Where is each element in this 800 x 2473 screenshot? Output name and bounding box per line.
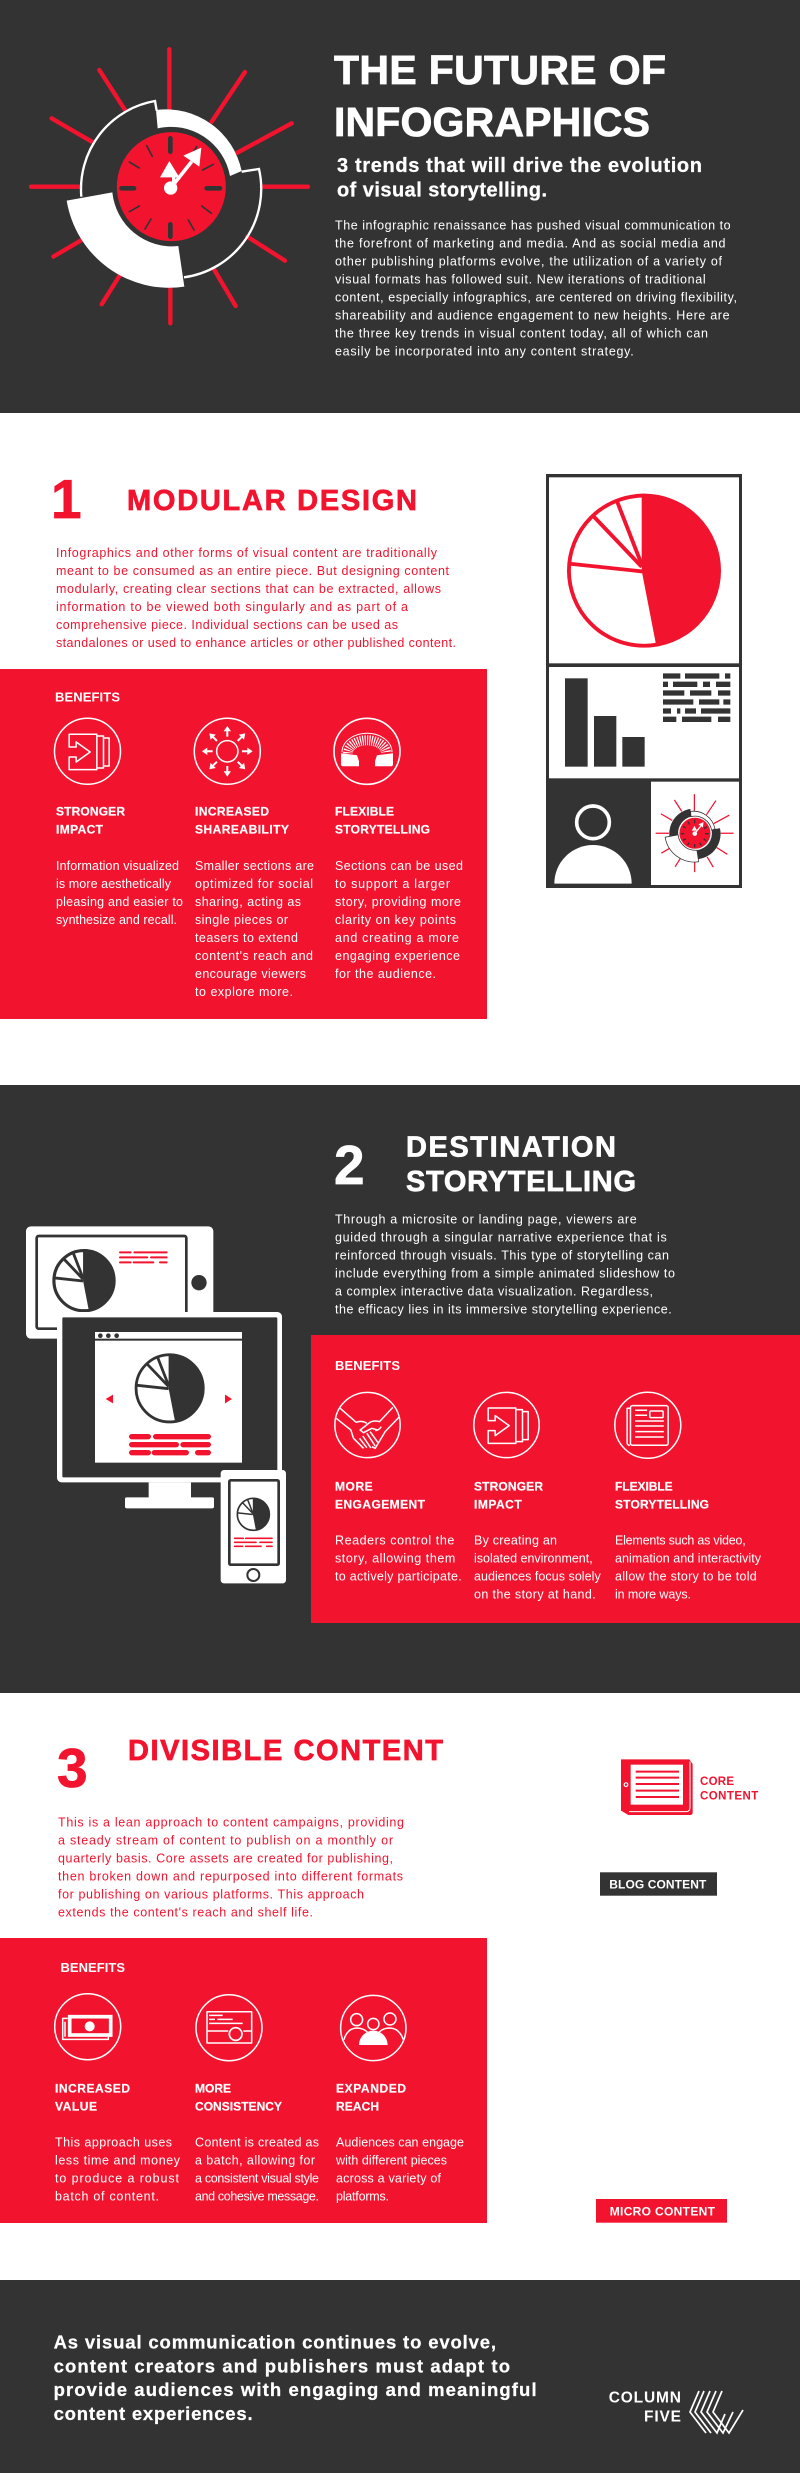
benefit text: stronger impact: By creating an (474, 1534, 557, 1548)
icon: core content tablet (621, 1759, 693, 1815)
benefit text: increased shareability: single pieces or (195, 913, 288, 927)
icon: consistency card (196, 1995, 262, 2061)
benefit headings 2: STRONGER (474, 1479, 543, 1493)
benefit text: increased shareability: Smaller sections are (195, 859, 314, 873)
section number 3: 3 (57, 1737, 88, 1799)
benefits label: BENEFITS (60, 1960, 125, 1975)
section 1 description: standalones or used to enhance articles or other published content. (56, 636, 456, 650)
benefit headings 2: MORE (335, 1479, 373, 1493)
heading: destination storytelling (406, 1132, 636, 1198)
intro text: content, especially infographics, are centered on driving flexibility, (335, 290, 737, 304)
benefit headings 1: FLEXIBLE (335, 804, 394, 818)
subtitle: of visual storytelling. (337, 180, 547, 202)
benefit text: flexible storytelling: clarity on key points (335, 913, 456, 927)
intro text: the forefront of marketing and media. And as social media and (335, 236, 726, 250)
section number 1: 1 (51, 468, 82, 530)
benefit text: increased shareability: to explore more. (195, 985, 293, 999)
illustration: devices (26, 1226, 286, 1583)
phone (221, 1470, 286, 1583)
benefit text: stronger impact (474, 1534, 601, 1602)
intro text: The infographic renaissance has pushed visual communication to (335, 218, 731, 232)
benefit text: flexible storytelling: in more ways. (615, 1588, 691, 1602)
benefit text: increased shareability: content's reach and (195, 949, 313, 963)
icon: stronger impact (55, 718, 120, 784)
panel: header (0, 0, 800, 413)
closing statement: content experiences. (54, 2403, 253, 2424)
benefit text: increased shareability: optimized for social (195, 877, 313, 891)
benefit headings 2: ENGAGEMENT (335, 1498, 426, 1512)
benefit text: flexible storytelling: engaging experience (335, 949, 460, 963)
benefits label: BENEFITS (335, 1358, 400, 1373)
benefit headings 3 (55, 2081, 406, 2113)
section 2 description: guided through a singular narrative experience that is (335, 1231, 667, 1245)
benefit text: expanded reach: platforms. (336, 2190, 389, 2204)
benefit text: flexible storytelling (615, 1534, 762, 1602)
panel: benefits 3 (0, 1938, 487, 2223)
tablet (26, 1226, 213, 1339)
label: core content: CONTENT (700, 1790, 758, 1802)
benefit text: flexible storytelling: Elements such as video, (615, 1534, 746, 1548)
benefit headings 2 (335, 1479, 709, 1512)
section 1 description (56, 546, 456, 650)
benefit text: stronger impact: is more aesthetically (56, 877, 172, 891)
section 1 description: comprehensive piece. Individual sections can be used as (56, 618, 398, 632)
subtitle: 3 trends that will drive the evolution (337, 155, 702, 177)
label: micro content: MICRO CONTENT (610, 2204, 716, 2218)
benefit text: expanded reach: with different pieces (335, 2154, 447, 2168)
benefit text: flexible storytelling: for the audience. (335, 967, 436, 981)
heading: destination storytelling: DESTINATION (406, 1132, 616, 1164)
section 3 description: quarterly basis. Core assets are created for publishing, (58, 1851, 393, 1865)
benefit text: stronger impact: synthesize and recall. (56, 913, 177, 927)
label: blog content (600, 1872, 717, 1896)
section 1 description: information to be viewed both singularly and as part of a (56, 600, 408, 614)
panel: divisible content (0, 1735, 758, 2223)
section 1 description: Infographics and other forms of visual content are traditionally (56, 546, 438, 560)
benefit text: increased value: to produce a robust (55, 2172, 180, 2186)
benefit text: flexible storytelling (335, 859, 463, 981)
icon: clock with rays (31, 49, 308, 323)
benefit text: increased value (55, 2136, 181, 2204)
icon: mini clock (656, 794, 734, 872)
label: core content (700, 1776, 758, 1802)
benefit text: more engagement (335, 1534, 462, 1584)
benefit text: increased value: less time and money (55, 2154, 181, 2168)
benefit text: stronger impact (56, 859, 183, 927)
section 1 description: meant to be consumed as an entire piece. But designing content (56, 564, 450, 578)
benefit text: more consistency: Content is created as (195, 2136, 319, 2150)
benefit headings 1: STORYTELLING (335, 823, 430, 837)
benefit text: expanded reach (335, 2136, 464, 2204)
section 3 description (58, 1815, 404, 1919)
monitor (57, 1312, 282, 1508)
intro text: other publishing platforms evolve, the utilization of a variety of (335, 254, 723, 268)
benefit text: stronger impact: audiences focus solely (474, 1570, 601, 1584)
logo: column five (609, 2390, 743, 2433)
logo: column five: FIVE (644, 2409, 681, 2426)
intro text: easily be incorporated into any content strategy. (335, 344, 634, 358)
benefit text: increased shareability: encourage viewers (195, 967, 306, 981)
icon: handshake (335, 1392, 400, 1458)
intro text (335, 218, 737, 358)
label: core content: CORE (700, 1776, 734, 1788)
logo: column five: COLUMN (609, 2390, 681, 2407)
benefit text: expanded reach: across a variety of (336, 2172, 442, 2186)
intro text: the three key trends in visual content today, all of which can (335, 326, 708, 340)
closing statement: As visual communication continues to evolve, (54, 2331, 496, 2352)
closing statement (54, 2331, 537, 2424)
icon: people (341, 1995, 406, 2061)
benefit headings 3: CONSISTENCY (195, 2099, 282, 2113)
section number 2: 2 (334, 1134, 365, 1196)
benefit headings 1: STRONGER (56, 804, 125, 818)
icon: person (554, 806, 632, 884)
section 1 description: modularly, creating clear sections that can be extracted, allows (56, 582, 441, 596)
benefit headings 3: EXPANDED (336, 2081, 406, 2095)
section 2 description (335, 1213, 675, 1317)
benefit text: expanded reach: Audiences can engage (336, 2136, 464, 2150)
intro text: shareability and audience engagement to new heights. Here are (335, 308, 730, 322)
heading: destination storytelling: STORYTELLING (406, 1166, 636, 1198)
benefit headings 1: INCREASED (195, 804, 269, 818)
benefit text: flexible storytelling: allow the story to be told (615, 1570, 757, 1584)
benefit headings 2: IMPACT (474, 1498, 522, 1512)
intro text: visual formats has followed suit. New iterations of traditional (335, 272, 706, 286)
benefit text: increased value: This approach uses (55, 2136, 172, 2150)
heading: modular design: MODULAR DESIGN (127, 485, 417, 517)
benefit text: stronger impact: on the story at hand. (474, 1588, 596, 1602)
benefit text: more engagement: Readers control the (335, 1534, 454, 1548)
icon: flexible storytelling slinky (334, 718, 400, 784)
title (334, 47, 666, 145)
panel: footer (0, 2280, 800, 2473)
title: INFOGRAPHICS (334, 99, 650, 145)
benefit headings 1: IMPACT (56, 823, 104, 837)
benefit headings 1 (56, 804, 430, 837)
benefit text: increased value: batch of content. (55, 2190, 159, 2204)
label: blog content: BLOG CONTENT (609, 1878, 707, 1892)
benefit text: more consistency: and cohesive message. (195, 2190, 319, 2204)
section 3 description: then broken down and repurposed into different formats (58, 1869, 403, 1883)
benefit text: increased shareability: teasers to extend (195, 931, 298, 945)
panel: destination storytelling (0, 1085, 800, 1693)
section 2 description: Through a microsite or landing page, viewers are (335, 1213, 637, 1227)
benefit headings 2: STORYTELLING (615, 1498, 709, 1512)
section 2 description: the efficacy lies in its immersive storytelling experience. (335, 1303, 672, 1317)
benefit text: more consistency (195, 2136, 319, 2204)
illustration: modular frame (546, 474, 742, 888)
pie chart: red (569, 494, 719, 646)
icon: money (55, 1994, 121, 2060)
benefit text: flexible storytelling: Sections can be used (335, 859, 463, 873)
text placeholder blocks (663, 673, 730, 722)
closing statement: provide audiences with engaging and meaningful (54, 2379, 537, 2400)
benefit text: increased shareability: sharing, acting as (195, 895, 301, 909)
benefit text: flexible storytelling: to support a larger (335, 877, 450, 891)
benefit headings 3: INCREASED (55, 2081, 130, 2095)
benefit text: flexible storytelling: and creating a more (335, 931, 459, 945)
icon: newspaper (615, 1392, 681, 1458)
section 3 description: extends the content's reach and shelf life. (58, 1905, 313, 1919)
section 3 description: a steady stream of content to publish on a monthly or (58, 1833, 393, 1847)
bar chart (565, 678, 645, 767)
benefit text: increased shareability (195, 859, 314, 999)
benefit text: more consistency: a batch, allowing for (195, 2154, 315, 2168)
section 2 description: include everything from a simple animated slideshow to (335, 1267, 675, 1281)
section 3 description: This is a lean approach to content campaigns, providing (58, 1815, 404, 1829)
benefits label: BENEFITS (55, 690, 120, 704)
icon: increased shareability (194, 718, 260, 784)
benefit text: stronger impact: pleasing and easier to (56, 895, 183, 909)
benefit text: more consistency: a consistent visual style (195, 2172, 319, 2186)
benefit headings 3: MORE (195, 2081, 231, 2095)
section 2 description: a complex interactive data visualization. Regardless, (335, 1285, 653, 1299)
benefit text: more engagement: to actively participate. (335, 1570, 462, 1584)
benefit text: more engagement: story, allowing them (335, 1552, 455, 1566)
title: THE FUTURE OF (334, 47, 666, 93)
benefit text: stronger impact: isolated environment, (474, 1552, 593, 1566)
closing statement: content creators and publishers must adapt to (54, 2355, 510, 2376)
benefit headings 1: SHAREABILITY (195, 823, 289, 837)
benefit text: flexible storytelling: story, providing more (335, 895, 461, 909)
benefit headings 2: FLEXIBLE (615, 1479, 673, 1493)
benefit text: flexible storytelling: animation and interactivity (615, 1552, 762, 1566)
benefit text: stronger impact: Information visualized (56, 859, 179, 873)
panel: modular design (0, 468, 742, 1019)
section 2 description: reinforced through visuals. This type of storytelling can (335, 1249, 669, 1263)
icon: stronger impact (474, 1392, 539, 1458)
label: micro content (596, 2199, 727, 2223)
panel: benefits 2 (311, 1335, 800, 1623)
panel: benefits 1 (0, 669, 487, 1019)
heading: divisible content: DIVISIBLE CONTENT (128, 1735, 443, 1767)
subtitle (337, 155, 702, 202)
benefit headings 3: REACH (336, 2099, 379, 2113)
section 3 description: for publishing on various platforms. This approach (58, 1887, 364, 1901)
benefit headings 3: VALUE (55, 2099, 97, 2113)
